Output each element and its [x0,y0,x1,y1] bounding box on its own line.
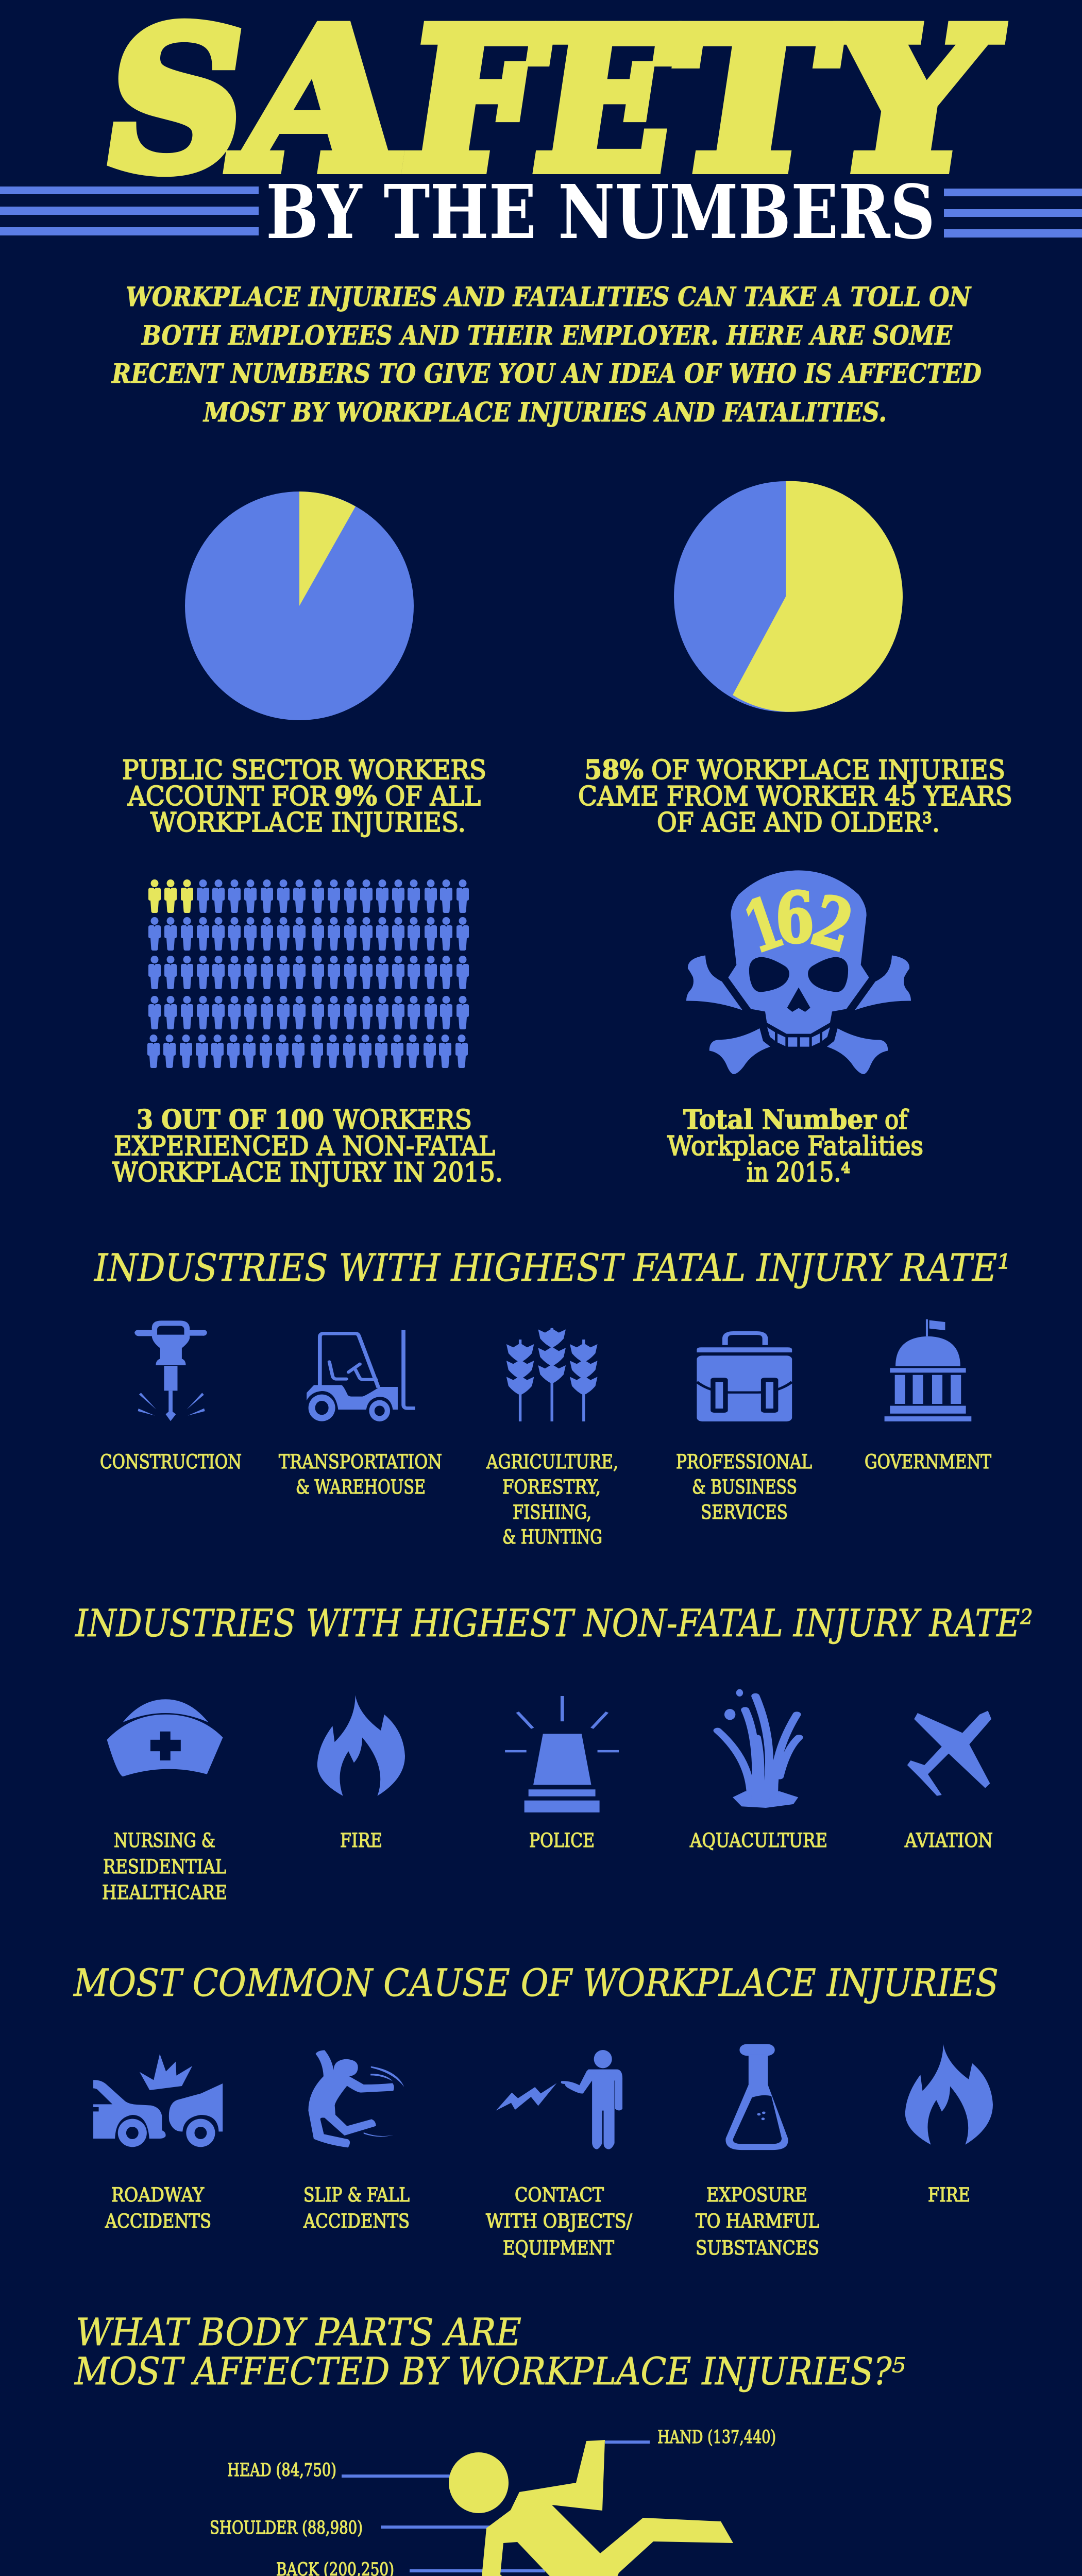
pie chart: 58% workers 45+ [674,481,903,712]
labels: causes: TO HARMFUL [696,2210,819,2232]
intro text: MOST BY WORKPLACE INJURIES AND FATALITIES. [202,397,887,428]
caption: total fatalities: of [885,1105,909,1136]
skull number 162: 1 [734,880,793,969]
figure [449,2440,733,2576]
crossbones [686,955,911,1074]
labels: causes: EXPOSURE [706,2184,807,2206]
icon: fire second [905,2044,993,2145]
icon: nurse cap [107,1699,223,1776]
eye sockets and nose [749,957,848,1012]
heading: body parts: MOST AFFECTED BY WORKPLACE INJURIES?⁵ [74,2350,905,2394]
labels: causes: WITH OBJECTS/ [486,2210,632,2232]
labels: causes: EQUIPMENT [503,2237,614,2259]
icon: airplane [907,1711,991,1796]
callout lines [342,2441,762,2576]
callout text: SHOULDER (88,980) [210,2518,363,2538]
heading: body parts: WHAT BODY PARTS ARE [76,2311,521,2354]
caption: public sector: OF ALL [385,782,481,812]
icon: flask [725,2044,788,2150]
caption: 58 percent [578,755,1012,838]
caption: total fatalities: Total Number [683,1105,877,1136]
skull number 162: 2 [804,879,861,968]
intro text: RECENT NUMBERS TO GIVE YOU AN IDEA OF WHO IS AFFECTED [111,359,982,389]
labels: causes: ACCIDENTS [303,2210,410,2232]
intro text: WORKPLACE INJURIES AND FATALITIES CAN TAKE A TOLL ON [126,282,972,313]
labels: fatal injury industries: & HUNTING [502,1526,602,1548]
heading: most common cause: MOST COMMON CAUSE OF WORKPLACE INJURIES [73,1961,999,2005]
heading: body parts [74,2311,905,2394]
labels: fatal injury industries: CONSTRUCTION [100,1451,242,1473]
icon: slip and fall [308,2050,404,2147]
icon: government building [885,1319,971,1421]
caption: 58 percent: CAME FROM WORKER 45 YEARS [578,782,1012,812]
caption: 3 out of 100 [112,1105,503,1188]
labels: fatal injury industries: SERVICES [701,1501,788,1523]
caption: public sector: PUBLIC SECTOR WORKERS [122,755,486,786]
labels: fatal injury industries [100,1451,991,1548]
labels: non-fatal injury industries: FIRE [340,1829,382,1852]
labels: causes: SLIP & FALL [303,2184,410,2206]
callout text: HAND (137,440) [657,2427,776,2448]
callout text [210,2427,890,2576]
labels: non-fatal injury industries: HEALTHCARE [102,1882,227,1904]
labels: fatal injury industries: & BUSINESS [692,1476,797,1498]
caption: total fatalities: Workplace Fatalities [667,1131,923,1162]
icon: police light [505,1696,619,1812]
caption: 3 out of 100: WORKPLACE INJURY IN 2015. [112,1158,503,1188]
icon: briefcase [697,1333,792,1421]
caption: 58 percent: OF AGE AND OLDER³. [657,808,940,838]
pictogram: 100 workers, 3 highlighted [147,879,469,1068]
labels: fatal injury industries: AGRICULTURE, [486,1451,618,1473]
icon: car crash [93,2054,223,2147]
chart: falling figure with body part callouts [210,2427,890,2576]
icon: jackhammer [134,1320,207,1421]
labels: non-fatal injury industries: AQUACULTURE [689,1829,827,1852]
caption: public sector: ACCOUNT FOR [127,782,329,812]
pie chart: 9% public sector [185,492,414,720]
labels: non-fatal injury industries [102,1829,993,1904]
labels: fatal injury industries: & WAREHOUSE [296,1476,426,1498]
icon: aquaculture [718,1689,799,1808]
cranium [728,870,869,1034]
skull number 162 [734,876,861,969]
caption: 58 percent: 58% [584,755,644,786]
caption: 3 out of 100: 3 OUT OF 100 [137,1105,324,1136]
caption: 3 out of 100: EXPERIENCED A NON-FATAL [114,1131,495,1162]
teeth [767,1027,830,1047]
labels: non-fatal injury industries: RESIDENTIAL [103,1856,226,1878]
labels: fatal injury industries: FORESTRY, [502,1476,601,1498]
caption: public sector: WORKPLACE INJURIES. [150,808,466,838]
caption: public sector [122,755,486,838]
left stripes [0,187,259,235]
caption: total fatalities: in 2015.⁴ [747,1158,850,1188]
labels: causes: CONTACT [515,2184,604,2206]
heading: fatal injury rate: INDUSTRIES WITH HIGHEST FATAL INJURY RATE¹ [93,1246,1011,1290]
intro text: BOTH EMPLOYEES AND THEIR EMPLOYER. HERE ARE SOME [141,320,953,351]
labels: causes [105,2184,970,2259]
labels: causes: ROADWAY [111,2184,205,2206]
skull number 162: 6 [774,876,816,959]
intro text [111,282,982,428]
callout text: HEAD (84,750) [227,2460,336,2481]
icon: forklift [307,1330,415,1421]
caption: total fatalities [667,1105,923,1188]
caption: 58 percent: OF WORKPLACE INJURIES [651,755,1005,786]
labels: non-fatal injury industries: NURSING & [114,1829,215,1852]
icon: skull with 162 [686,870,911,1074]
labels: non-fatal injury industries: AVIATION [904,1829,993,1852]
icon: fire [317,1695,405,1796]
right stripes [944,189,1082,238]
labels: fatal injury industries: FISHING, [513,1501,591,1523]
icon: contact with equipment [496,2050,622,2149]
icon: wheat [506,1328,598,1421]
labels: fatal injury industries: PROFESSIONAL [676,1451,812,1473]
title: SAFETY [91,0,1009,214]
labels: fatal injury industries: TRANSPORTATION [279,1451,442,1473]
labels: causes: ACCIDENTS [105,2210,211,2232]
subtitle text: BY THE NUMBERS [266,168,935,256]
labels: non-fatal injury industries: POLICE [529,1829,595,1852]
subtitle with side stripes [0,168,1082,256]
caption: public sector: 9% [334,781,377,812]
caption: 3 out of 100: WORKERS [333,1105,472,1136]
labels: causes: FIRE [928,2184,970,2206]
labels: fatal injury industries: GOVERNMENT [865,1451,991,1473]
labels: causes: SUBSTANCES [696,2237,819,2259]
